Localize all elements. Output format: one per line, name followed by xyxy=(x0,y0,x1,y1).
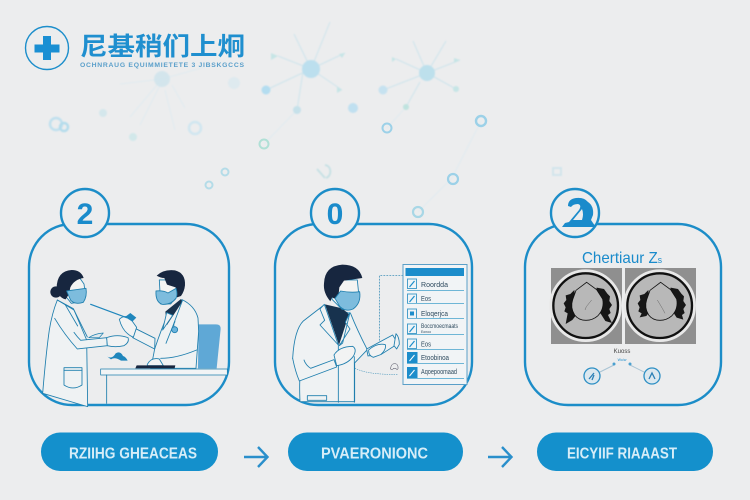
logo icon: medical cross xyxy=(26,26,68,70)
checklist rows: Etoobinoa xyxy=(421,355,449,362)
head xyxy=(332,280,359,309)
checklist rows: Eloqerjca xyxy=(421,311,448,318)
checklist rows: Aqoepoomaad xyxy=(421,369,457,376)
raised arm xyxy=(367,335,398,356)
small ear icon xyxy=(391,364,398,370)
male hands xyxy=(119,317,137,337)
background ring nodes xyxy=(206,116,486,217)
pill label 3 xyxy=(537,432,713,471)
woman coat xyxy=(43,300,88,407)
checklist rows: Eos xyxy=(421,342,431,348)
step badge 2 xyxy=(311,189,359,237)
background molecular network xyxy=(50,22,561,212)
male doctor head xyxy=(159,280,177,304)
title: 尼基稍们上炯 xyxy=(80,33,245,61)
scan image right xyxy=(625,268,696,344)
pill label 1: RZIIHG GHEACEAS xyxy=(69,446,197,462)
coat xyxy=(293,305,367,402)
panel heading: Chertiaur Zs xyxy=(582,250,662,267)
checklist rows: Roordda xyxy=(421,282,448,289)
subtitle: OCHNRAUG EQUIMMIETETE 3 JIBSKGCCS xyxy=(80,62,244,69)
swab xyxy=(91,304,127,318)
checklist card xyxy=(403,264,467,384)
step badge 2: 0 xyxy=(327,198,343,231)
pill label 3: EICYIIF RIAAAST xyxy=(567,446,677,462)
arm on chest xyxy=(293,358,337,381)
panel 3: scan comparison: Wo/w xyxy=(618,358,627,362)
chair xyxy=(198,324,221,368)
step badge 1 xyxy=(61,189,109,237)
specimen object xyxy=(107,352,128,361)
connector nodes xyxy=(584,362,660,384)
arrow 2 xyxy=(488,447,512,467)
pill label 2: PVAERONIONC xyxy=(321,446,428,462)
scan image left xyxy=(551,268,622,344)
illustration: doctor and patient xyxy=(43,270,227,407)
checklist rows xyxy=(407,279,464,378)
woman hand xyxy=(107,336,128,347)
panel 1: consultation xyxy=(29,224,229,407)
pill label 2 xyxy=(288,432,463,471)
male doctor coat xyxy=(151,300,199,368)
checklist rows: Eonoo xyxy=(421,330,431,334)
panel 2: checklist review xyxy=(275,224,472,405)
woman head xyxy=(66,277,85,303)
illustration: doctor pointing to checklist xyxy=(293,265,403,402)
scan caption: Kuoss xyxy=(614,349,630,355)
step badge 3 xyxy=(551,189,599,237)
panel 3: scan comparison xyxy=(525,224,721,405)
checklist rows: Eos xyxy=(421,296,431,303)
arrow 1 xyxy=(244,447,268,467)
desk xyxy=(101,369,227,375)
step badge 1: 2 xyxy=(77,198,93,231)
pill label 1 xyxy=(41,432,218,471)
checklist rows: Boccmoecmaats xyxy=(421,323,459,330)
